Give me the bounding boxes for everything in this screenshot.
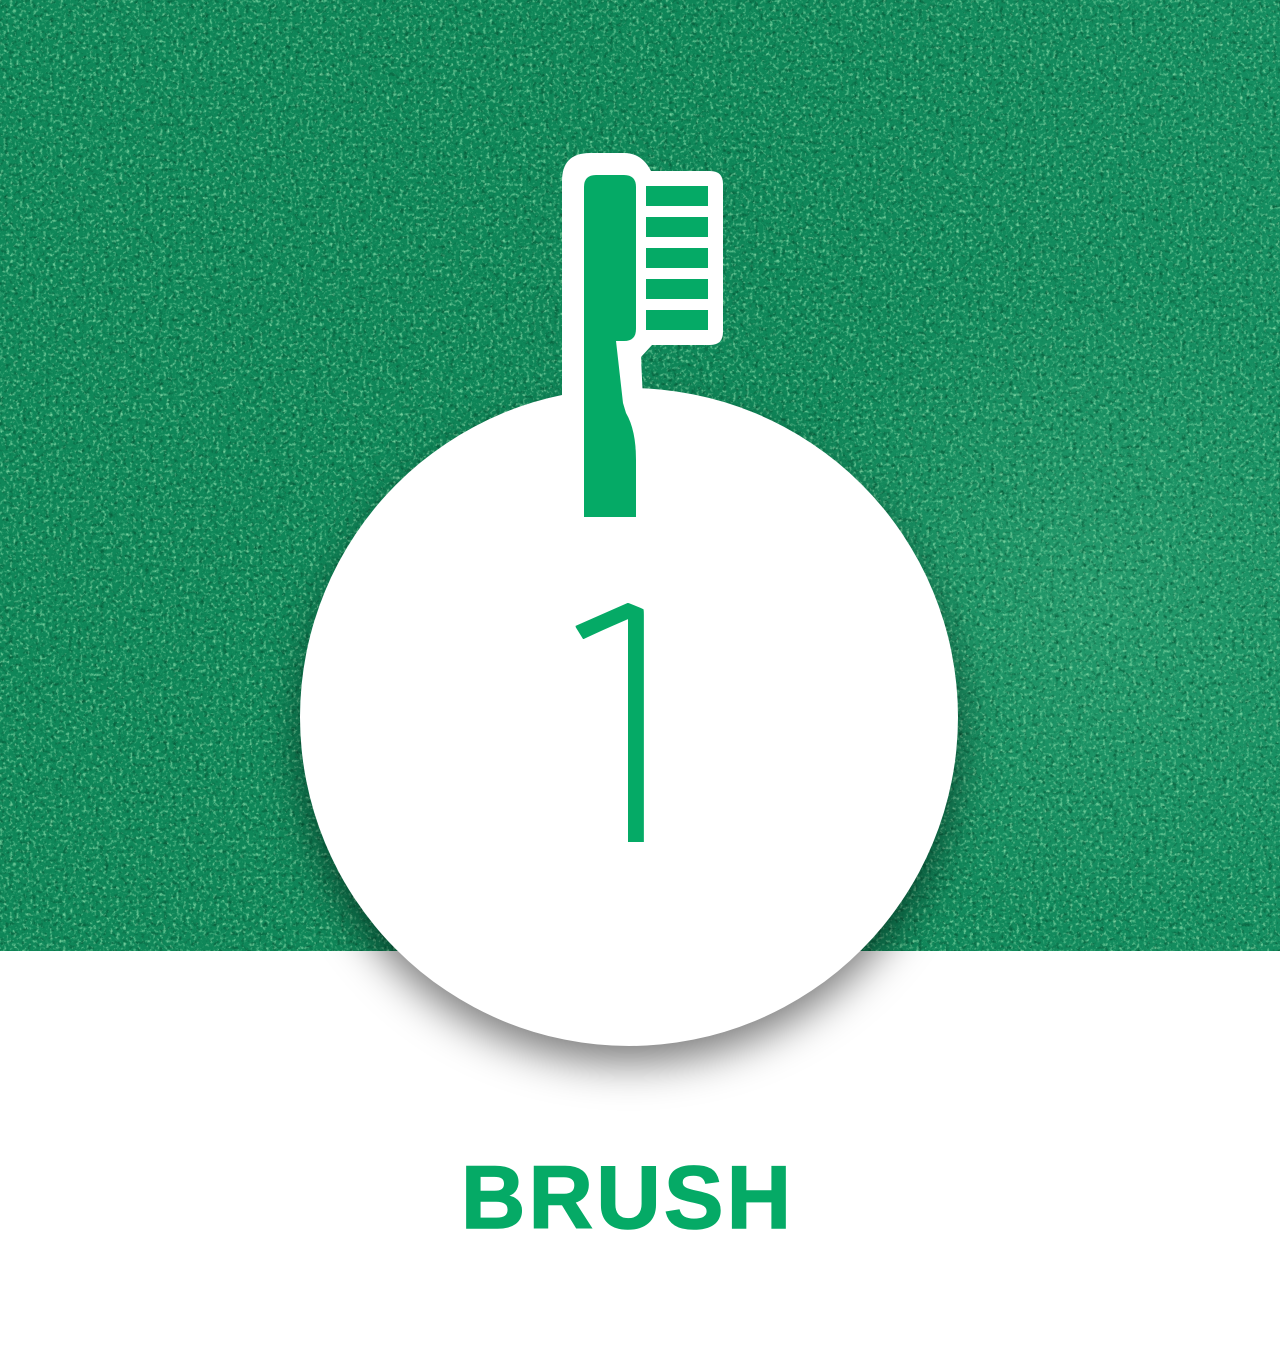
white circle [300,388,958,1046]
toothbrush handle [584,175,636,517]
toothbrush white outline [562,153,723,400]
toothbrush bristles [646,186,708,330]
step number: 1 [525,521,726,933]
panel: textured green background [0,0,1280,951]
heading: BRUSH: BRUSH [461,1147,791,1247]
icon: toothbrush [562,153,723,517]
circle drop shadow [303,411,955,1063]
